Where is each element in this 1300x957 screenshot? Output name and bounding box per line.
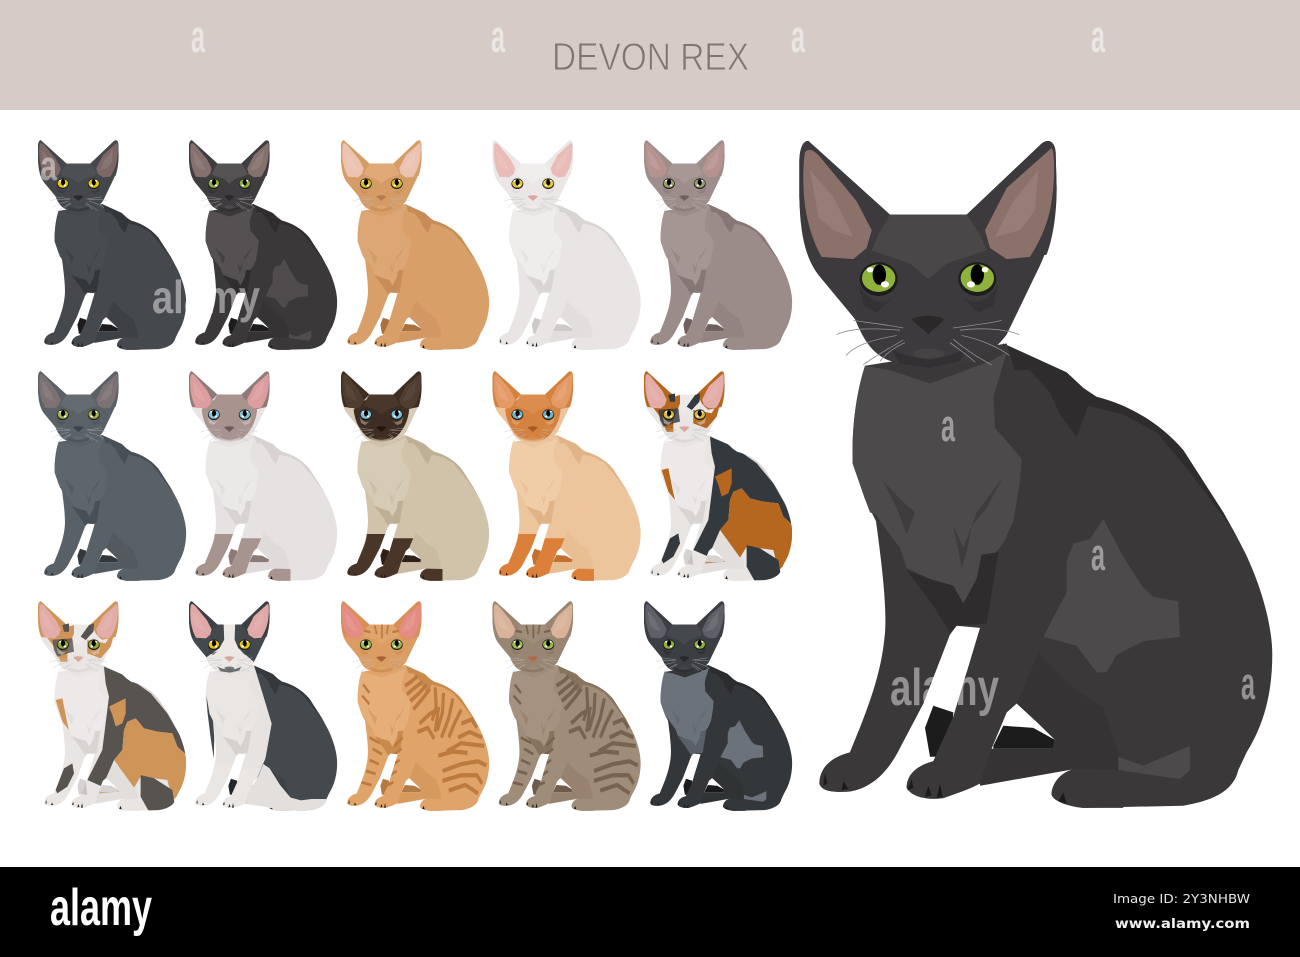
cat: black with blue chest xyxy=(644,601,792,811)
footer bar xyxy=(0,867,1300,957)
cat: lilac xyxy=(644,140,792,350)
header band xyxy=(0,0,1300,110)
title: DEVON REX xyxy=(552,36,749,79)
cat: lilac point xyxy=(189,371,337,581)
watermarks: alamy xyxy=(152,271,260,323)
cat: charcoal xyxy=(38,140,186,350)
watermarks: a xyxy=(941,400,956,451)
cat grid xyxy=(38,140,793,812)
cat: seal point xyxy=(341,371,489,581)
watermarks: a xyxy=(491,11,506,62)
cat: calico xyxy=(644,371,793,582)
large black cat xyxy=(799,141,1272,808)
cat: black smoke xyxy=(189,140,337,350)
watermarks: a xyxy=(1091,529,1106,580)
cat: blue grey xyxy=(38,371,186,581)
watermarks xyxy=(40,11,1256,717)
cat: fawn xyxy=(341,140,489,350)
watermarks: alamy xyxy=(890,659,999,717)
footer logo: alamy xyxy=(50,879,152,937)
cat: orange tabby xyxy=(341,601,489,811)
watermarks: a xyxy=(40,142,57,189)
cat: black and white xyxy=(189,601,337,811)
image id: Image ID: 2Y3NHBW xyxy=(1113,891,1250,906)
website: www.alamy.com xyxy=(1115,916,1250,932)
cat: white xyxy=(493,140,641,350)
watermarks: a xyxy=(1241,658,1256,709)
cat: flame point xyxy=(493,371,641,581)
watermarks: a xyxy=(791,11,806,62)
watermarks: a xyxy=(191,11,206,62)
cat: brown tabby xyxy=(493,601,641,811)
cat: dilute calico xyxy=(38,601,187,812)
watermarks: a xyxy=(1091,11,1106,62)
